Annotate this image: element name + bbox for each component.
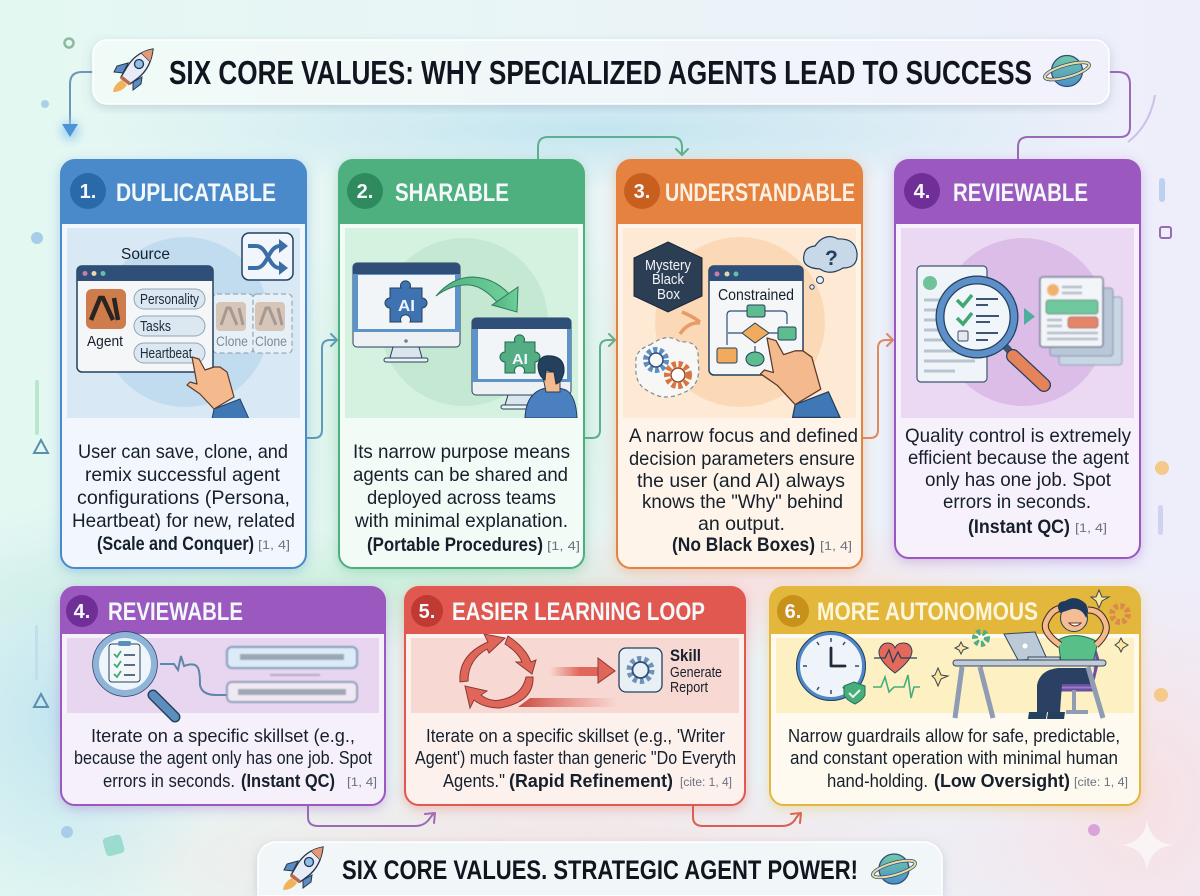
body text: an output. bbox=[698, 513, 785, 535]
body text: (Scale and Conquer) bbox=[97, 533, 254, 555]
document bbox=[917, 266, 987, 382]
icon: gear box bbox=[619, 648, 662, 692]
body text: Agent') much faster than generic "Do Everyth bbox=[415, 747, 736, 768]
header bbox=[895, 160, 1140, 224]
body text: configurations (Persona, bbox=[77, 487, 290, 509]
header: 2. bbox=[357, 181, 373, 203]
source monitor bbox=[353, 263, 460, 362]
illustration: magnifier and blurred outputs bbox=[67, 632, 379, 717]
icon: mystery black box: Mystery bbox=[645, 258, 692, 274]
icon: gears bbox=[975, 606, 1128, 644]
header: MORE AUTONOMOUS bbox=[817, 598, 1038, 626]
body text: only has one job. Spot bbox=[925, 469, 1112, 491]
icon: heart and pulse bbox=[873, 643, 920, 698]
arrow: card 1 to card 2 bbox=[306, 334, 337, 438]
arrow: bottom card 4 to card 5 bbox=[308, 805, 435, 826]
body text: hand-holding. bbox=[827, 770, 928, 791]
icon: hand pointer bbox=[187, 357, 249, 419]
illustration: source agent and clones bbox=[67, 228, 300, 419]
body text: A narrow focus and defined bbox=[629, 425, 858, 447]
body text: Its narrow purpose means bbox=[353, 441, 570, 463]
arrow: card 2 to card 3 bbox=[584, 334, 615, 438]
header: 4. bbox=[914, 181, 930, 203]
agent window: Personality bbox=[140, 292, 200, 308]
icon: hand pointer bbox=[761, 338, 840, 417]
icon: triangle pointer bbox=[1024, 308, 1035, 325]
icon: shuffle bbox=[242, 233, 293, 280]
illustration: document inspection bbox=[901, 228, 1134, 418]
icon: transfer arrow bbox=[436, 277, 518, 312]
icon: mystery black box bbox=[634, 242, 702, 312]
body text: (Instant QC) bbox=[968, 516, 1070, 538]
panel: 2 sharable bbox=[339, 160, 584, 568]
title banner bbox=[93, 40, 1109, 104]
body text: errors in seconds. bbox=[943, 491, 1091, 513]
connector arrows bbox=[61, 72, 1130, 826]
illustration: source agent and clones: Source bbox=[121, 246, 170, 263]
header: REVIEWABLE bbox=[108, 598, 243, 626]
body text: [1, 4] bbox=[547, 541, 580, 553]
body text: Iterate on a specific skillset (e.g., 'Writer bbox=[426, 725, 725, 746]
illustration: relaxed user and clock bbox=[776, 590, 1134, 719]
illustration: black box versus constrained flow bbox=[623, 228, 857, 418]
icon: laptop bbox=[1004, 632, 1060, 660]
panel: 5 easier learning loop bbox=[405, 587, 745, 805]
body text bbox=[788, 725, 1128, 791]
body text: (Instant QC) bbox=[241, 770, 335, 791]
icon: orange arrow bbox=[680, 312, 700, 334]
icon: mystery black box: Black bbox=[652, 272, 685, 288]
header: DUPLICATABLE bbox=[116, 179, 276, 207]
header bbox=[61, 160, 306, 224]
header bbox=[61, 587, 385, 634]
header bbox=[339, 160, 584, 224]
header bbox=[405, 587, 745, 634]
body text bbox=[74, 725, 377, 791]
header: UNDERSTANDABLE bbox=[665, 179, 855, 207]
header: 3. bbox=[634, 181, 650, 203]
panel: 4 reviewable bbox=[895, 160, 1140, 558]
body text: [1, 4] bbox=[820, 541, 852, 553]
header bbox=[617, 160, 862, 224]
agent window: Heartbeat bbox=[140, 346, 192, 362]
desk bbox=[953, 660, 1106, 718]
panel: 4 reviewable bottom bbox=[61, 587, 385, 805]
footer text: SIX CORE VALUES. STRATEGIC AGENT POWER! bbox=[342, 855, 858, 885]
constrained window: Constrained bbox=[718, 287, 794, 304]
body text: remix successful agent bbox=[85, 464, 281, 486]
header: EASIER LEARNING LOOP bbox=[452, 598, 705, 626]
constrained window bbox=[709, 266, 803, 375]
target monitor bbox=[472, 318, 571, 409]
target monitor: AI bbox=[512, 351, 528, 368]
body text: [cite: 1, 4] bbox=[680, 777, 732, 789]
icon: clock bbox=[796, 632, 866, 704]
source monitor: AI bbox=[398, 298, 415, 315]
skill label: Skill bbox=[670, 646, 701, 665]
clones: Clone bbox=[255, 334, 287, 349]
body text: (Portable Procedures) bbox=[367, 534, 543, 556]
agent window bbox=[77, 266, 213, 372]
header: REVIEWABLE bbox=[953, 179, 1088, 207]
body text: Quality control is extremely bbox=[905, 425, 1131, 447]
panel: 3 understandable bbox=[617, 160, 862, 568]
icon: person bbox=[525, 356, 577, 418]
header bbox=[770, 587, 1140, 634]
skill label bbox=[670, 646, 722, 696]
body text: (No Black Boxes) bbox=[672, 534, 815, 556]
arrow: card 3 to card 4 bbox=[862, 334, 893, 438]
body text: Narrow guardrails allow for safe, predictable, bbox=[788, 725, 1120, 746]
icon: planet bbox=[1043, 56, 1091, 86]
body text: User can save, clone, and bbox=[78, 441, 288, 463]
icon: mystery black box: Box bbox=[657, 287, 681, 303]
body text bbox=[905, 425, 1131, 538]
body text: [1, 4] bbox=[1075, 523, 1107, 535]
skill label: Generate bbox=[670, 665, 722, 681]
body text: the user (and AI) always bbox=[637, 470, 845, 492]
body text: [cite: 1, 4] bbox=[1074, 777, 1128, 789]
panel: 6 more autonomous bbox=[770, 587, 1140, 805]
body text: because the agent only has one job. Spot bbox=[74, 747, 372, 768]
icon: rocket bbox=[113, 49, 153, 92]
illustration: sharing puzzle piece bbox=[345, 228, 578, 418]
chair bbox=[1058, 640, 1098, 712]
connector pulse bbox=[160, 656, 229, 695]
body text: Agents." bbox=[443, 770, 505, 791]
illustration: loop and skill bbox=[411, 634, 739, 713]
header: 5. bbox=[419, 601, 435, 623]
icon: rocket bbox=[283, 847, 323, 890]
icon: magnifier with checklist bbox=[93, 632, 175, 717]
arrow: card 2 to card 3 over top bbox=[538, 137, 688, 160]
header: 1. bbox=[80, 181, 96, 203]
header: SHARABLE bbox=[395, 179, 509, 207]
body text: (Low Oversight) bbox=[934, 770, 1070, 791]
clones bbox=[213, 294, 292, 353]
blurred report stack bbox=[1040, 277, 1122, 365]
body text: and constant operation with minimal human bbox=[790, 747, 1118, 768]
icon: thought cloud bbox=[804, 237, 857, 289]
body text: deployed across teams bbox=[367, 487, 556, 509]
footer banner bbox=[258, 842, 942, 896]
skill label: Report bbox=[670, 680, 708, 696]
body text: Iterate on a specific skillset (e.g., bbox=[91, 725, 355, 746]
icon: thought cloud: ? bbox=[825, 247, 838, 270]
body text: errors in seconds. bbox=[103, 770, 235, 791]
icon: sparkles bbox=[932, 590, 1128, 686]
body text: with minimal explanation. bbox=[354, 510, 568, 532]
body text: knows the "Why" behind bbox=[642, 491, 843, 513]
panel: 1 duplicatable bbox=[61, 160, 306, 568]
body text bbox=[629, 425, 858, 556]
agent window: Tasks bbox=[140, 319, 171, 335]
clones: Clone bbox=[216, 334, 248, 349]
body text: (Rapid Refinement) bbox=[509, 770, 673, 791]
icon: gears cloud bbox=[636, 338, 699, 397]
body text bbox=[72, 441, 295, 555]
body text bbox=[353, 441, 580, 556]
icon: red arrows bbox=[518, 658, 618, 707]
body text: Heartbeat) for new, related bbox=[72, 510, 295, 532]
arrow: title to card 1 bbox=[61, 72, 93, 140]
header: 4. bbox=[74, 601, 90, 623]
body text: [1, 4] bbox=[347, 777, 377, 789]
body text bbox=[415, 725, 736, 791]
header: 6. bbox=[785, 601, 801, 623]
icon: person relaxing bbox=[1028, 598, 1106, 719]
blurred output boxes bbox=[227, 647, 357, 702]
body text: decision parameters ensure bbox=[629, 448, 855, 470]
arrow: card 4 to title bbox=[1018, 72, 1130, 160]
icon: cycle arrows bbox=[460, 634, 536, 708]
body text: [1, 4] bbox=[258, 540, 290, 552]
body text: efficient because the agent bbox=[908, 447, 1130, 469]
icon: magnifier bbox=[940, 280, 1044, 385]
icon: planet bbox=[871, 854, 917, 884]
body text: agents can be shared and bbox=[353, 464, 568, 486]
arrow: card 5 to card 6 bbox=[693, 805, 801, 826]
agent window: Agent bbox=[87, 333, 124, 350]
